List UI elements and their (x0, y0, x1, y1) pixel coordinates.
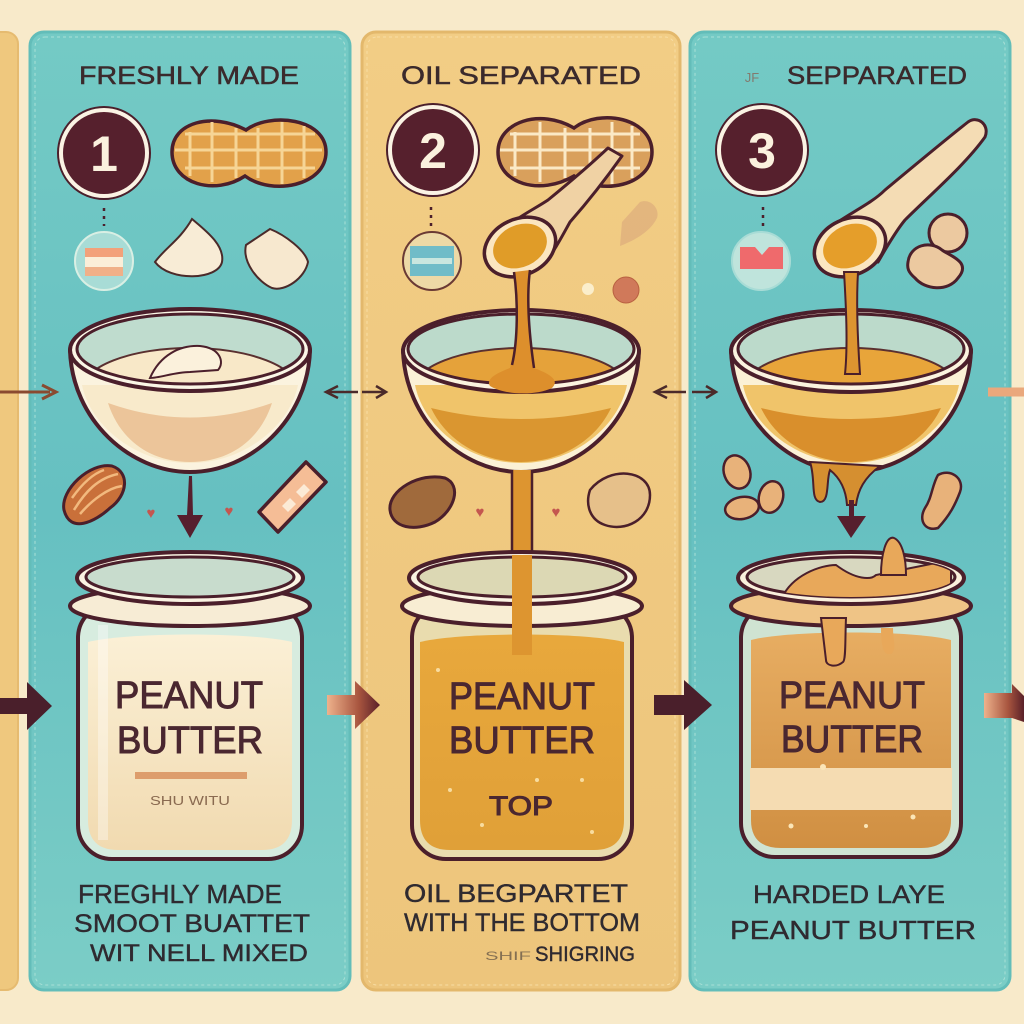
arrow: lower 1 to 2 (327, 681, 380, 729)
caption: OIL BEGPARTET (404, 880, 628, 908)
icon: butter chunk (588, 474, 650, 527)
icon: connector (762, 207, 764, 226)
arrow: lower right (984, 684, 1024, 722)
caption: FREGHLY MADE (78, 879, 282, 909)
spoon and oil stream (475, 148, 622, 393)
jar label: PEANUT (449, 676, 595, 718)
jar label (779, 675, 925, 761)
badge: step 2: 2 (419, 123, 447, 179)
icon: swatch jar (75, 232, 133, 290)
badge: step 2 (387, 104, 479, 196)
jar label: BUTTER (449, 720, 595, 762)
jar (70, 552, 310, 859)
jar (402, 552, 642, 859)
jar label (449, 676, 595, 821)
arrow: top right (988, 388, 1024, 396)
arrow: lower left (0, 682, 52, 730)
arrow: top left (0, 385, 56, 399)
heading: freshly made: FRESHLY MADE (79, 62, 299, 90)
icon: hearts: ♥ (552, 504, 561, 521)
icon: butter dollop (155, 219, 222, 276)
bowl (70, 309, 310, 472)
icon: peanut right (922, 473, 961, 529)
icon: peanuts left (719, 452, 787, 522)
icon: peanut left (64, 466, 125, 524)
jar label: BUTTER (781, 719, 923, 761)
badge: step 1: 1 (90, 126, 118, 182)
jar label: TOP (489, 791, 553, 821)
caption: PEANUT BUTTER (730, 915, 976, 945)
caption: SMOOT BUATTET (74, 910, 310, 938)
icon: peanut cluster (908, 214, 967, 288)
spoon and stream (805, 120, 986, 374)
jar label (115, 675, 263, 762)
arrow: top 1 to 2 (326, 386, 386, 398)
icon: butter chunk (245, 229, 308, 289)
stream: bowl to jar (504, 470, 540, 660)
badge: step 3: 3 (748, 123, 776, 179)
panel: oil separated (362, 32, 680, 990)
jar ornament: SHU WITU (150, 793, 230, 808)
jar label: PEANUT (779, 675, 925, 717)
caption (404, 880, 640, 966)
icon: peanut (498, 118, 652, 186)
heading: separated: SEPPARATED (787, 62, 967, 90)
icon: connector (430, 207, 432, 226)
arrow: top 2 to 3 (655, 386, 716, 398)
caption: HARDED LAYE (753, 881, 945, 909)
panel: hardened (690, 32, 1010, 990)
icon: drops (582, 277, 639, 303)
arrow: bowl to jar (177, 476, 203, 538)
heading: oil separated: OIL SEPARATED (401, 62, 641, 90)
badge: step 3 (716, 104, 808, 196)
icon: hearts: ♥ (476, 504, 485, 521)
icon: peanut left (390, 477, 455, 527)
icon: hearts: ♥ (147, 505, 156, 522)
heading: separated: JF (745, 70, 759, 85)
jar label: PEANUT (115, 675, 263, 717)
icon: hearts (147, 503, 234, 522)
bowl (731, 310, 971, 472)
jar ornament (135, 772, 247, 808)
arrows between panels (0, 385, 1024, 730)
icon: peanut (172, 120, 326, 186)
icon: small connector (103, 208, 105, 226)
caption: SHIGRING (535, 943, 635, 966)
badge: step 1 (58, 107, 150, 199)
icon: swatch (403, 232, 461, 290)
icon: swatch (732, 232, 790, 290)
panel: previous stage edge (0, 32, 18, 990)
caption: WIT NELL MIXED (90, 940, 308, 967)
drips (810, 462, 880, 505)
caption (74, 879, 310, 967)
arrow: lower 2 to 3 (654, 680, 712, 730)
arrow: bowl to jar (837, 500, 866, 538)
caption (730, 881, 976, 945)
caption: WITH THE BOTTOM (404, 909, 640, 937)
jar label: BUTTER (117, 720, 263, 762)
bowl (403, 310, 639, 472)
icon: peanut chunk (620, 201, 658, 246)
jar (731, 538, 971, 857)
icon: hearts: ♥ (225, 503, 234, 520)
icon: hearts (476, 504, 561, 521)
panel: freshly made (30, 32, 350, 990)
icon: butter piece (259, 462, 326, 532)
caption: SHIF (485, 949, 531, 963)
